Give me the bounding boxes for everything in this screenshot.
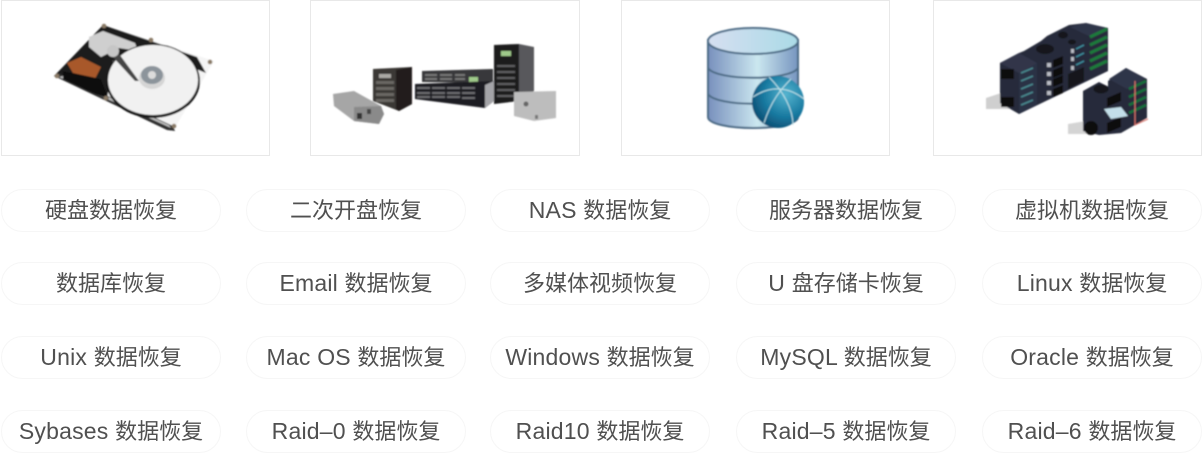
panel: NAS storage devices image [310, 0, 580, 156]
pill: Unix 数据恢复 [1, 336, 221, 379]
pill: 二次开盘恢复 [246, 189, 466, 232]
pill: Oracle 数据恢复: Oracle 数据恢复 [1010, 344, 1174, 370]
pill: Mac OS 数据恢复 [246, 336, 466, 379]
pill: U 盘存储卡恢复 [736, 262, 956, 305]
pill: 虚拟机数据恢复 [982, 189, 1202, 232]
pill: Email 数据恢复 [246, 262, 466, 305]
pill: Raid-5 数据恢复 [736, 410, 956, 453]
icon: isometric server racks [986, 22, 1149, 136]
pill: Email 数据恢复: Email 数据恢复 [279, 270, 433, 296]
pill: NAS 数据恢复 [490, 189, 710, 232]
panel: server racks image [933, 0, 1202, 156]
icon: database cylinder with globe [706, 26, 806, 130]
pill: 多媒体视频恢复 [490, 262, 710, 305]
pill: MySQL 数据恢复 [736, 336, 956, 379]
pill: 多媒体视频恢复: 多媒体视频恢复 [523, 271, 677, 296]
pill: Raid10 数据恢复 [490, 410, 710, 453]
pill: Raid-0 数据恢复 [246, 410, 466, 453]
pill: Windows 数据恢复 [490, 336, 710, 379]
pill: 虚拟机数据恢复: 虚拟机数据恢复 [1015, 198, 1169, 223]
pill: Sybases 数据恢复 [1, 410, 221, 453]
pill: Raid-5 数据恢复: Raid–5 数据恢复 [762, 418, 930, 444]
pill: NAS 数据恢复: NAS 数据恢复 [529, 197, 671, 223]
pill: 数据库恢复: 数据库恢复 [56, 271, 166, 296]
pill: Unix 数据恢复: Unix 数据恢复 [40, 344, 182, 370]
pill: 硬盘数据恢复 [1, 189, 221, 232]
pill: Sybases 数据恢复: Sybases 数据恢复 [19, 418, 203, 444]
panel: database image [621, 0, 890, 156]
icon: storage servers group [332, 42, 557, 125]
pill: Raid-6 数据恢复 [982, 410, 1202, 453]
pill: 数据库恢复 [1, 262, 221, 305]
pill: Linux 数据恢复: Linux 数据恢复 [1017, 270, 1167, 296]
pill: Linux 数据恢复 [982, 262, 1202, 305]
pill: U 盘存储卡恢复: U 盘存储卡恢复 [768, 270, 924, 296]
pill: Raid-0 数据恢复: Raid–0 数据恢复 [272, 418, 440, 444]
pill: 硬盘数据恢复: 硬盘数据恢复 [45, 198, 177, 223]
pill: 服务器数据恢复: 服务器数据恢复 [769, 198, 923, 223]
pill: MySQL 数据恢复: MySQL 数据恢复 [760, 344, 932, 370]
icon: open hard disk drive [53, 22, 214, 132]
pill: Mac OS 数据恢复: Mac OS 数据恢复 [267, 344, 445, 370]
pill: Oracle 数据恢复 [982, 336, 1202, 379]
pill: 服务器数据恢复 [736, 189, 956, 232]
pill: Windows 数据恢复: Windows 数据恢复 [505, 344, 695, 370]
pill: 二次开盘恢复: 二次开盘恢复 [290, 198, 422, 223]
panel: hard disk image [1, 0, 270, 156]
pill: Raid10 数据恢复: Raid10 数据恢复 [516, 418, 684, 444]
pill: Raid-6 数据恢复: Raid–6 数据恢复 [1008, 418, 1176, 444]
